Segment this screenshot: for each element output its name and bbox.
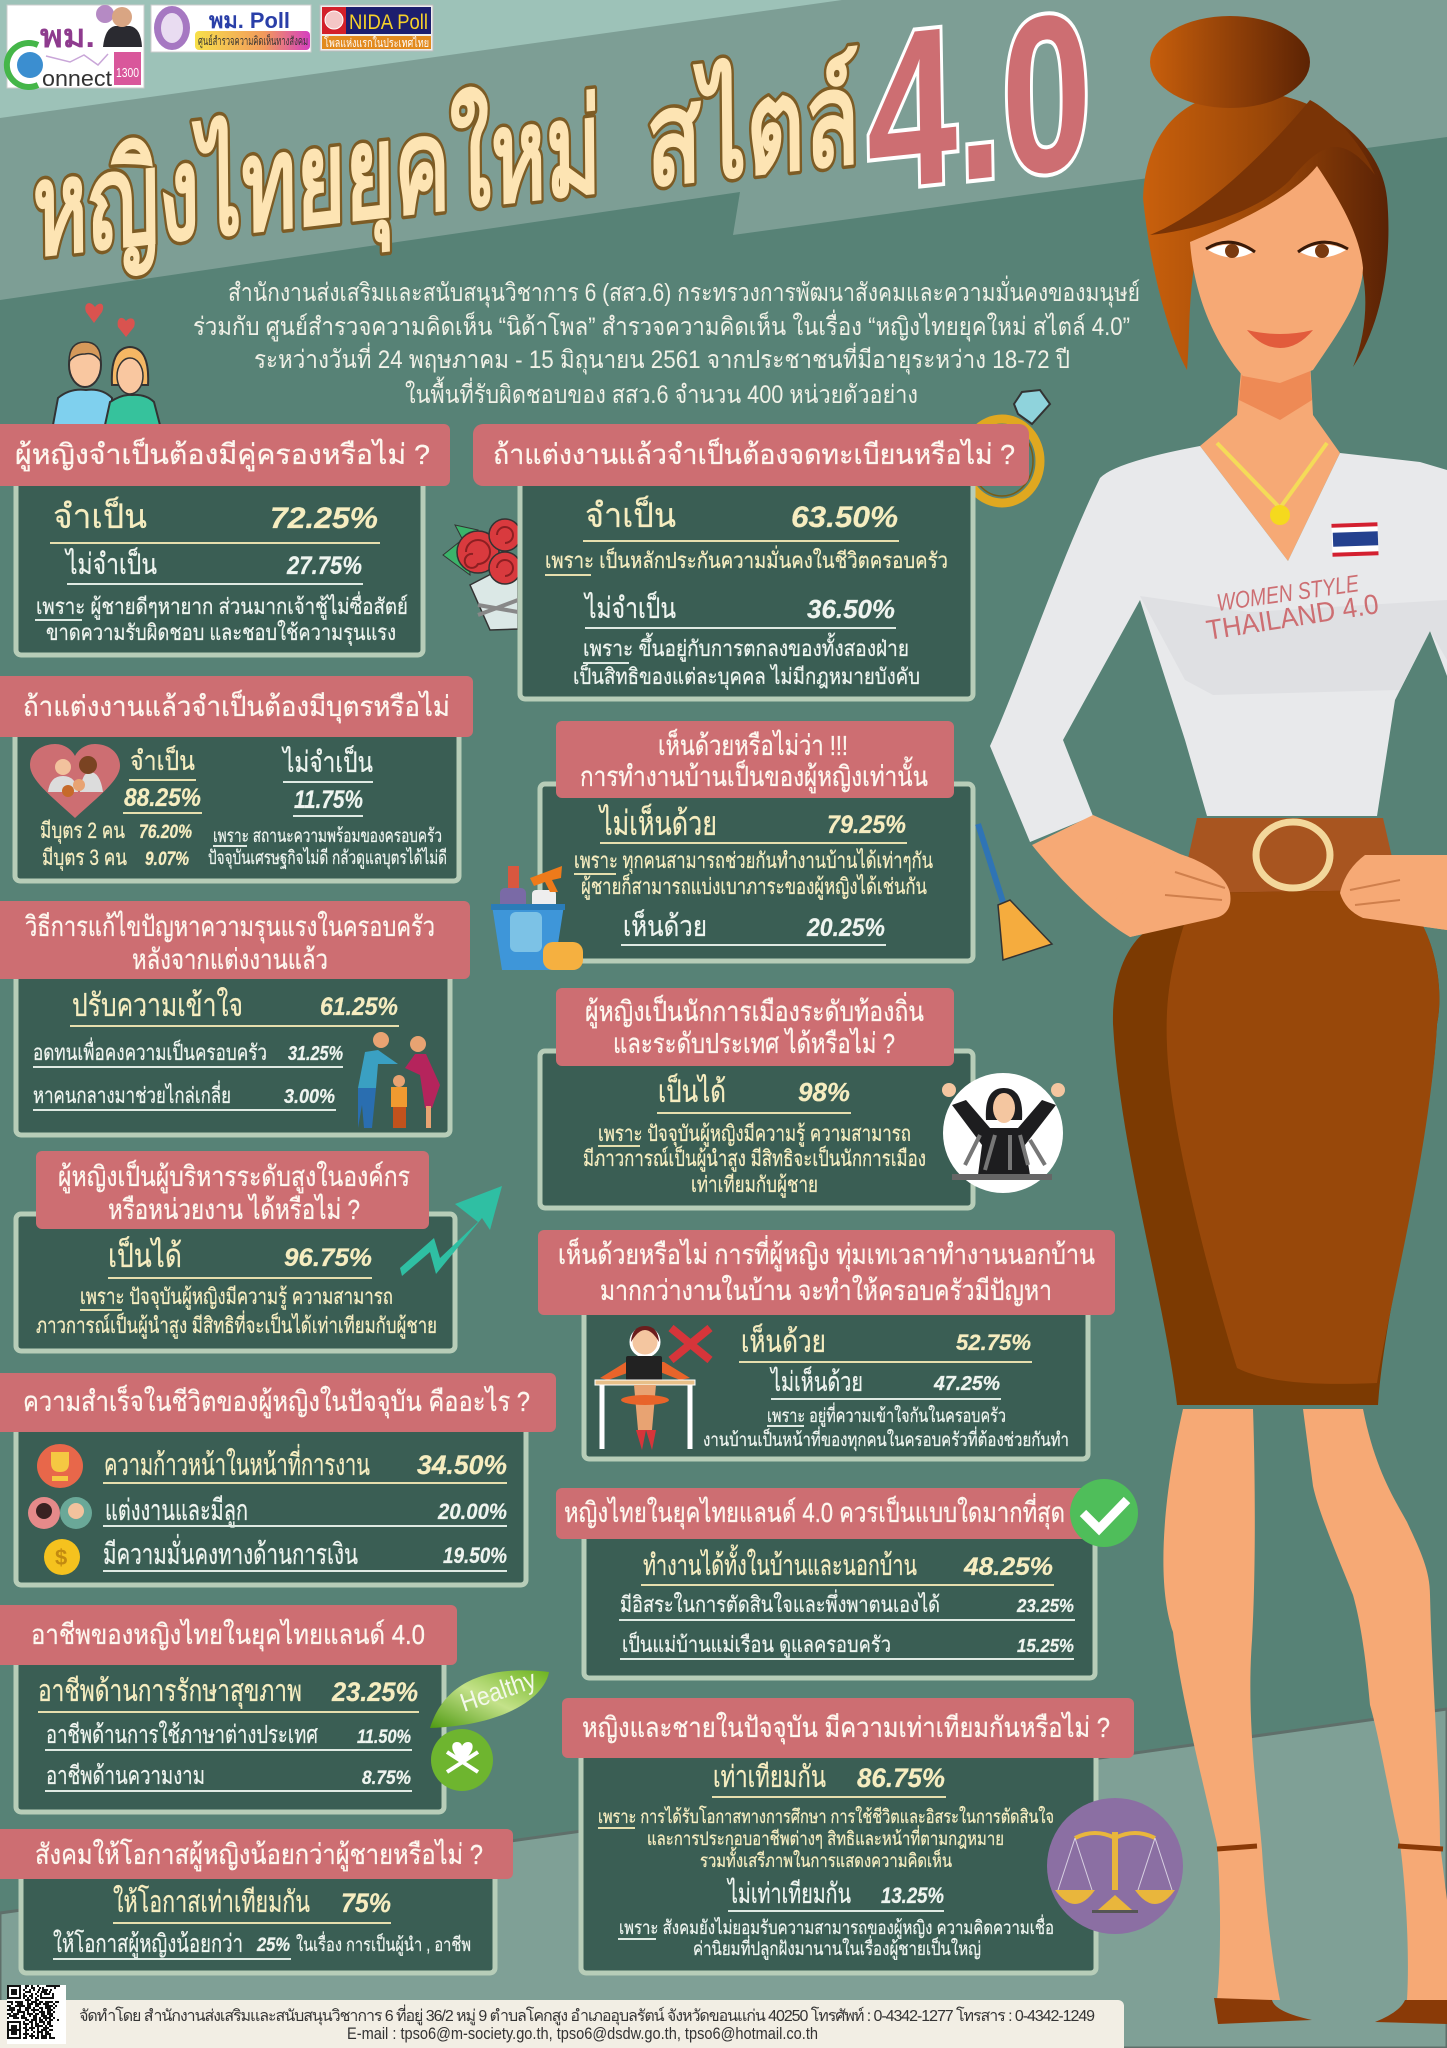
woman illustration: [990, 16, 1447, 2024]
icon: scales of justice: [1047, 1798, 1183, 1934]
hair back: [1143, 91, 1388, 370]
equal result: 86.75%: [857, 1763, 945, 1793]
needed result: จำเป็น: [130, 743, 195, 776]
icon: wedding ring: [964, 390, 1050, 503]
icon: woman politician at podium: [942, 1073, 1065, 1193]
icon: rising arrow: [400, 1186, 502, 1276]
right forearm: [1340, 855, 1447, 930]
equal reason: รวมทั้งเสรีภาพในการแสดงความคิดเห็น: [700, 1847, 952, 1872]
unequal reason: เพราะ สังคมยังไม่ยอมรับความสามารถของผู้หญิง ความคิดความเชื่อ: [619, 1914, 1054, 1939]
logo: MSDHS Poll: ศูนย์สำรวจความคิดเห็นทางสังคม: [198, 33, 308, 49]
panel: society gives women less opportunity: [0, 1829, 513, 1973]
heading: ผู้หญิงเป็นนักการเมืองระดับท้องถิ่น: [585, 992, 924, 1029]
face: [1190, 166, 1363, 383]
equal opportunity result: ให้โอกาสเท่าเทียมกัน: [113, 1884, 310, 1919]
heading: ผู้หญิงจำเป็นต้องมีคู่ครองหรือไม่ ?: [15, 437, 430, 472]
icon: check mark: [1070, 1479, 1138, 1547]
primary result: ทำงานได้ทั้งในบ้านและนอกบ้าน: [643, 1544, 917, 1582]
heading: [0, 424, 450, 486]
secondary reason: เป็นสิทธิของแต่ละบุคคล ไม่มีกฎหมายบังคับ: [573, 662, 920, 690]
disagree result: 79.25%: [827, 811, 906, 839]
hair bun: [1150, 16, 1310, 108]
less opportunity result: ในเรื่อง การเป็นผู้นำ , อาชีพ: [296, 1931, 471, 1956]
reason: ขาดความรับผิดชอบ และชอบใช้ความรุนแรง: [46, 620, 396, 646]
eyes: [1206, 242, 1348, 258]
unequal reason: [618, 1914, 1054, 1960]
panel: women as politicians: [540, 988, 973, 1208]
secondary result: [64, 546, 363, 584]
primary result: อาชีพด้านการรักษาสุขภาพ: [38, 1675, 302, 1710]
reason: [208, 826, 447, 870]
primary result: จำเป็น: [53, 496, 147, 536]
frame: [584, 1525, 1095, 1678]
heading: [0, 676, 473, 737]
equal result: [712, 1761, 946, 1797]
disagree result: ไม่เห็นด้วย: [598, 803, 717, 843]
neck and chest: [1200, 360, 1340, 561]
reason: [35, 591, 408, 646]
reason: [583, 1121, 926, 1198]
option: beauty careers: [45, 1762, 412, 1791]
title: Thai headline: หญิงไทยยุคใหม่: [32, 71, 602, 293]
skirt highlight: [1167, 890, 1439, 1384]
primary result: 72.25%: [270, 502, 378, 535]
reason: เพราะ ปัจจุบันผู้หญิงมีความรู้ ความสามารถ: [80, 1284, 393, 1310]
icon: couple avatars: [28, 1497, 92, 1529]
result: เป็นได้: [108, 1236, 182, 1274]
reason: เพราะ ผู้ชายดีๆหายาก ส่วนมากเจ้าชู้ไม่ซื่อสัตย์: [36, 591, 408, 620]
heading: [556, 721, 954, 798]
disagree result: [598, 803, 907, 843]
intro text block: ร่วมกับ ศูนย์สำรวจความคิดเห็น “นิด้าโพล” สำรวจความคิดเห็น ในเรื่อง “หญิงไทยยุคใหม่ สไตล์ 4.0”: [193, 309, 1130, 342]
skirt: [1113, 890, 1439, 1405]
footer bar: [0, 2000, 1124, 2048]
disagree result: ไม่เห็นด้วย: [770, 1364, 863, 1397]
secondary result: ไม่จำเป็น: [64, 546, 157, 581]
primary result: 63.50%: [791, 501, 898, 534]
panel: must women have a partner: [0, 424, 450, 655]
agree result: เห็นด้วย: [623, 908, 707, 943]
reason: [703, 1402, 1069, 1452]
intro text block: ระหว่างวันที่ 24 พฤษภาคม - 15 มิถุนายน 2561 จากประชาชนที่มีอายุระหว่าง 18-72 ปี: [254, 342, 1070, 375]
primary result: ปรับความเข้าใจ: [72, 987, 243, 1023]
primary result: 48.25%: [963, 1553, 1053, 1581]
heading: มากกว่างานในบ้าน จะทำให้ครอบครัวมีปัญหา: [600, 1274, 1052, 1306]
intro text block: สำนักงานส่งเสริมและสนับสนุนวิชาการ 6 (สสว.6) กระทรวงการพัฒนาสังคมและความมั่นคงของมนุษย์: [228, 275, 1140, 308]
frame: [16, 1214, 455, 1351]
agree result: 20.25%: [806, 914, 885, 942]
intro text block: [193, 275, 1140, 409]
primary result: [50, 496, 380, 543]
background: upper diagonal band: [0, 0, 1447, 300]
footer bar: จัดทำโดย สำนักงานส่งเสริมและสนับสนุนวิชาการ 6 ที่อยู่ 36/2 หมู่ 9 ตำบลโคกสูง อำเภออุบลรัตน์ จังหวัดขอนแก่น 40250 โทรศัพท์ : 0-4342-1277 โทรสาร : 0-4342-1249: [79, 2004, 1095, 2026]
logo: Ministry Connect: 1300: [116, 65, 139, 80]
option: independence: 23.25%: [1016, 1596, 1074, 1616]
panel: careers of Thai women: [0, 1605, 457, 1812]
icon: healthy leaf: Healthy: [456, 1664, 540, 1718]
heading: ถ้าแต่งงานแล้วจำเป็นต้องมีบุตรหรือไม่: [23, 689, 450, 724]
children breakdown: มีบุตร 2 คน: [40, 818, 125, 844]
option: mediator: 3.00%: [284, 1086, 335, 1108]
reason: [574, 848, 933, 900]
disagree result: [770, 1364, 1001, 1399]
logo: NIDA Poll: โพลแห่งแรกในประเทศไทย: [324, 36, 429, 50]
panel: must register marriage: [473, 424, 1029, 699]
needed result: 88.25%: [124, 784, 201, 812]
hair dark sweep: [1150, 100, 1375, 235]
less opportunity result: [53, 1929, 471, 1959]
equal reason: [598, 1805, 1054, 1872]
result: 98%: [798, 1077, 850, 1107]
panel: what success means: [0, 1373, 556, 1585]
heading: หญิงไทยในยุคไทยแลนด์ 4.0 ควรเป็นแบบใดมากที่สุด: [564, 1493, 1065, 1530]
primary reason: เพราะ เป็นหลักประกันความมั่นคงในชีวิตครอบครัว: [545, 545, 948, 573]
secondary result: ไม่จำเป็น: [583, 590, 676, 625]
logo: NIDA Poll: NIDA Poll: [349, 11, 428, 34]
background: floor band: [0, 1709, 1447, 2048]
right hand: [1340, 855, 1447, 930]
option: beauty careers: 8.75%: [362, 1768, 411, 1789]
heading: หญิงและชายในปัจจุบัน มีความเท่าเทียมกันหรือไม่ ?: [582, 1711, 1110, 1745]
icon: couple with hearts: [53, 303, 160, 425]
Thai flag: [1331, 522, 1379, 557]
left forearm: [1032, 815, 1230, 937]
primary result: 23.25%: [331, 1677, 418, 1707]
reason: เพราะ ปัจจุบันผู้หญิงมีความรู้ ความสามารถ: [598, 1121, 911, 1147]
children breakdown: [40, 818, 192, 871]
frame: [16, 1415, 526, 1585]
reason: ผู้ชายก็สามารถแบ่งเบาภาระของผู้หญิงได้เช่นกัน: [581, 872, 927, 900]
secondary reason: เพราะ ขึ้นอยู่กับการตกลงของทั้งสองฝ่าย: [583, 633, 909, 662]
option: financial security: มีความมั่นคงทางด้านการเงิน: [103, 1534, 358, 1571]
finger lines: [1165, 872, 1400, 905]
option: language careers: 11.50%: [357, 1727, 411, 1748]
children breakdown: 9.07%: [145, 849, 189, 870]
icon: broom: [978, 824, 1052, 960]
icon: healthy food circle: [431, 1729, 493, 1791]
icon: family argument: [358, 1032, 440, 1128]
left leg: [1163, 1409, 1280, 2000]
QR code: [7, 1985, 66, 2044]
icon: trophy: [37, 1444, 83, 1488]
equal reason: เพราะ การได้รับโอกาสทางการศึกษา การใช้ชีวิตและอิสระในการตัดสินใจ: [598, 1805, 1054, 1828]
agree result: [739, 1323, 1032, 1362]
logo: MSDHS Poll: พม. Poll: [209, 8, 290, 33]
unequal result: ไม่เท่าเทียมกัน: [727, 1878, 851, 1909]
heading: [0, 1829, 513, 1879]
heading: [538, 1230, 1115, 1315]
shirt: [990, 446, 1447, 842]
title: Thai headline: สไตล์: [646, 41, 860, 214]
frame: [15, 720, 459, 881]
panel: ideal Thai woman in Thailand 4.0: [556, 1479, 1138, 1678]
frame: [581, 1745, 1096, 1973]
heading: [556, 1488, 1095, 1539]
background: top light corner: [0, 0, 842, 118]
icon: gold coin: $: [55, 1545, 67, 1570]
heading: [0, 1373, 556, 1432]
unequal reason: ค่านิยมที่ปลูกฝังมานานในเรื่องผู้ชายเป็นใหญ่: [693, 1935, 981, 1960]
panel: work outside vs home: [538, 1230, 1115, 1459]
icon: cleaning bucket: [491, 866, 583, 970]
icon: gold coin: [44, 1539, 80, 1575]
icon: family in heart: [30, 744, 120, 818]
reason: ภาวการณ์เป็นผู้นำสูง มีสิทธิที่จะเป็นได้เท่าเทียมกับผู้ชาย: [36, 1310, 437, 1339]
primary result: จำเป็น: [585, 495, 676, 535]
heading: วิธีการแก้ไขปัญหาความรุนแรงในครอบครัว: [25, 910, 435, 944]
option: beauty careers: อาชีพด้านความงาม: [46, 1762, 205, 1790]
right shoe: [1375, 2000, 1447, 2024]
unequal result: 13.25%: [881, 1883, 944, 1908]
heading: ผู้หญิงเป็นผู้บริหารระดับสูงในองค์กร: [58, 1159, 410, 1194]
panel: resolving domestic violence: [0, 901, 470, 1135]
children breakdown: มีบุตร 3 คน: [42, 845, 127, 871]
heading: [473, 424, 1029, 486]
less opportunity result: ให้โอกาสผู้หญิงน้อยกว่า: [53, 1929, 243, 1959]
option: independence: [619, 1589, 1075, 1620]
panel: housework is women's only: [540, 721, 973, 961]
equal opportunity result: 75%: [341, 1888, 391, 1918]
not needed result: ไม่จำเป็น: [281, 744, 373, 779]
heading: และระดับประเทศ ได้หรือไม่ ?: [613, 1028, 895, 1059]
frame: [540, 1051, 973, 1208]
frame: [520, 470, 973, 699]
lips: [1247, 330, 1313, 348]
option: marriage and children: [103, 1495, 507, 1528]
frame: [16, 1650, 444, 1812]
shirt text: THAILAND 4.0: [1204, 588, 1381, 646]
right leg: [1303, 1409, 1447, 2000]
logo: Ministry Connect: [7, 5, 144, 91]
frame: [540, 784, 973, 961]
shirt text: WOMEN STYLE: [1215, 570, 1361, 617]
heading: [556, 988, 954, 1066]
option: endure: 31.25%: [288, 1043, 343, 1065]
option: language careers: อาชีพด้านการใช้ภาษาต่างประเทศ: [46, 1720, 318, 1749]
left hand: [1110, 851, 1230, 937]
reason: เท่าเทียมกับผู้ชาย: [691, 1172, 818, 1198]
option: independence: มีอิสระในการตัดสินใจและพึ่งพาตนเองได้: [620, 1589, 940, 1617]
heading: [562, 1698, 1134, 1758]
result: [108, 1236, 372, 1278]
agree result: 52.75%: [956, 1330, 1031, 1355]
icon: bouquet of roses: [443, 519, 521, 630]
agree result: [621, 908, 886, 945]
heading: หรือหน่วยงาน ได้หรือไม่ ?: [108, 1194, 360, 1225]
not needed result: 11.75%: [294, 786, 363, 814]
option: housewife: เป็นแม่บ้านแม่เรือน ดูแลครอบครัว: [622, 1630, 891, 1658]
equal reason: และการประกอบอาชีพต่างๆ สิทธิและหน้าที่ตามกฎหมาย: [647, 1825, 1004, 1850]
not needed result: [281, 744, 373, 816]
heading: ความสำเร็จในชีวิตของผู้หญิงในปัจจุบัน คืออะไร ?: [23, 1384, 530, 1419]
option: career: 34.50%: [417, 1450, 507, 1480]
secondary result: 27.75%: [286, 552, 362, 580]
equal result: เท่าเทียมกัน: [713, 1761, 826, 1794]
secondary reason: [573, 633, 920, 690]
logo: MSDHS Poll: [151, 5, 311, 52]
option: housewife: [620, 1630, 1074, 1659]
option: mediator: หาคนกลางมาช่วยไกล่เกลี่ย: [33, 1080, 231, 1108]
disagree result: 47.25%: [933, 1373, 1000, 1395]
option: financial security: 19.50%: [443, 1543, 507, 1568]
heading: หลังจากแต่งงานแล้ว: [132, 944, 328, 975]
ankle straps: [1217, 1846, 1443, 1849]
primary result: [583, 495, 899, 541]
reason: งานบ้านเป็นหน้าที่ของทุกคนในครอบครัวที่ต้องช่วยกันทำ: [703, 1426, 1069, 1452]
frame: [16, 960, 450, 1135]
heading: อาชีพของหญิงไทยในยุคไทยแลนด์ 4.0: [31, 1618, 425, 1652]
reason: [36, 1284, 437, 1339]
reason: มีภาวการณ์เป็นผู้นำสูง มีสิทธิจะเป็นนักการเมือง: [583, 1144, 926, 1172]
heading: [36, 1151, 429, 1229]
option: marriage and children: 20.00%: [437, 1499, 507, 1524]
heading: [0, 1605, 457, 1665]
result: 96.75%: [284, 1244, 372, 1272]
reason: เพราะ สถานะความพร้อมของครอบครัว: [213, 826, 442, 847]
less opportunity result: 25%: [256, 1935, 290, 1956]
logo: Ministry Connect: onnect: [42, 66, 112, 91]
heading: การทำงานบ้านเป็นของผู้หญิงเท่านั้น: [580, 756, 928, 794]
primary result: 61.25%: [320, 993, 398, 1021]
neck shadow: [1239, 370, 1312, 420]
option: endure: อดทนเพื่อคงความเป็นครอบครัว: [33, 1037, 267, 1065]
buckle: [1256, 822, 1330, 888]
icon: woman working at desk: [595, 1326, 710, 1450]
logo: Ministry Connect: พม.: [40, 18, 95, 54]
reason: เพราะ ทุกคนสามารถช่วยกันทำงานบ้านได้เท่าๆกัน: [574, 848, 933, 874]
agree result: เห็นด้วย: [741, 1323, 826, 1359]
heading: เห็นด้วยหรือไม่ว่า !!!: [658, 728, 848, 761]
panel: must have children: [0, 676, 473, 881]
left shoe: [1214, 1998, 1312, 2024]
necklace: [1217, 443, 1327, 525]
heading: สังคมให้โอกาสผู้หญิงน้อยกว่าผู้ชายหรือไม่ ?: [35, 1838, 483, 1872]
option: career: ความก้าวหน้าในหน้าที่การงาน: [104, 1444, 370, 1482]
children breakdown: 76.20%: [139, 822, 192, 843]
reason: ปัจจุบันเศรษฐกิจไม่ดี กลัวดูแลบุตรได้ไม่ดี: [208, 847, 447, 870]
footer bar: E-mail : tpso6@m-society.go.th, tpso6@dsdw.go.th, tpso6@hotmail.co.th: [347, 2024, 818, 2043]
frame: [21, 1862, 495, 1973]
secondary result: 36.50%: [807, 594, 895, 624]
option: housewife: 15.25%: [1017, 1636, 1074, 1656]
result: [657, 1073, 851, 1113]
panel: women as senior executives: [16, 1151, 455, 1351]
logo: NIDA Poll: [320, 5, 433, 51]
frame: [16, 470, 423, 655]
needed result: [123, 743, 202, 813]
panel: equality of men and women: [562, 1698, 1134, 1973]
shirt shadow band: [1140, 596, 1447, 695]
reason: เพราะ อยู่ที่ความเข้าใจกันในครอบครัว: [767, 1402, 1006, 1427]
intro text block: ในพื้นที่รับผิดชอบของ สสว.6 จำนวน 400 หน่วยตัวอย่าง: [405, 376, 918, 409]
icon: healthy leaf: [430, 1664, 549, 1728]
belt: [1180, 818, 1400, 895]
primary result: [70, 987, 399, 1026]
heading: [0, 901, 470, 979]
secondary result: [583, 590, 896, 628]
result: เป็นได้: [658, 1073, 726, 1109]
frame: [584, 1300, 1088, 1459]
option: marriage and children: แต่งงานและมีลูก: [105, 1495, 248, 1528]
heading: เห็นด้วยหรือไม่ การที่ผู้หญิง ทุ่มเทเวลาทำงานนอกบ้าน: [558, 1235, 1095, 1272]
heading: ถ้าแต่งงานแล้วจำเป็นต้องจดทะเบียนหรือไม่ ?: [493, 437, 1015, 470]
